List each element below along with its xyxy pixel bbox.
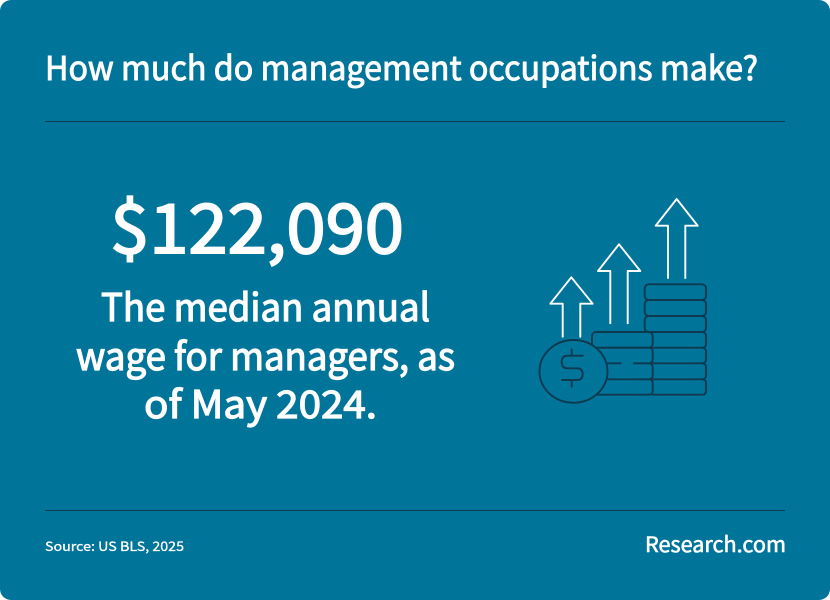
icon: medium coin stack — [592, 332, 653, 395]
icon: dollar coin — [540, 340, 608, 403]
headline wage figure: $122,090 — [110, 174, 404, 273]
wage description — [76, 277, 455, 429]
icon: three upward arrows — [550, 199, 698, 337]
title: How much do management occupations make? — [45, 42, 758, 90]
logo: Research.com: Research.com — [645, 529, 786, 559]
icon: tall coin stack — [645, 284, 706, 395]
wage description: of May 2024. — [144, 374, 377, 429]
wage description: The median annual — [101, 277, 430, 332]
icon: coin stacks with rising arrows — [540, 199, 706, 403]
source note: Source: US BLS, 2025 — [45, 536, 184, 555]
wage description: wage for managers, as — [76, 326, 455, 381]
